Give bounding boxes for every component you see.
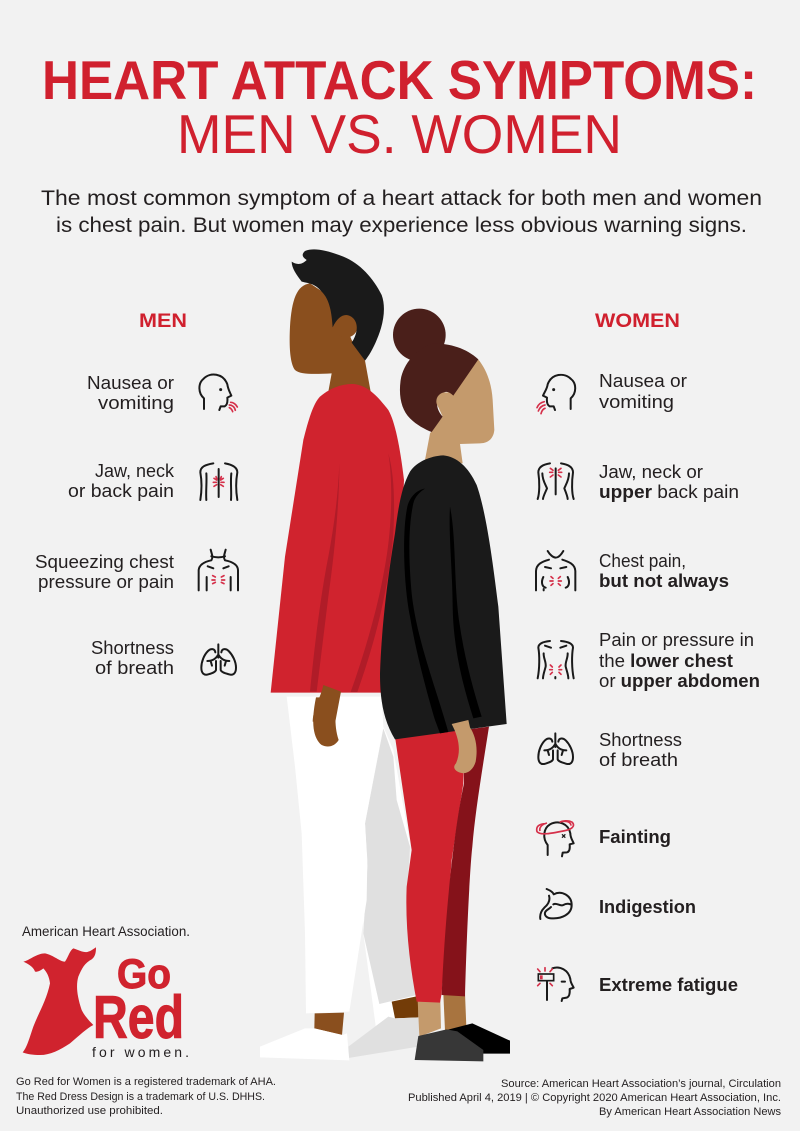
footer: trademark notice: Unauthorized use prohibited.: [16, 1105, 163, 1117]
women symptom: lower chest or upper abdomen: [599, 629, 760, 691]
men symptom: shortness of breath: Shortness: [91, 637, 174, 658]
women symptom: chest pain, but not always: [599, 550, 729, 591]
icon: chest pressure: [199, 550, 238, 590]
footer: source and copyright: [408, 1078, 781, 1118]
footer: source and copyright: Source: American Heart Association’s journal, Circulation: [501, 1078, 781, 1090]
women symptom: shortness of breath: of breath: [599, 749, 678, 770]
women symptom: nausea: Nausea or: [599, 370, 687, 391]
title: HEART ATTACK SYMPTOMS:: [42, 49, 757, 111]
heading: men: MEN: [139, 310, 187, 332]
man's hair: [292, 249, 384, 361]
women symptom: nausea: [599, 370, 687, 412]
icon: head vomiting: [199, 375, 237, 412]
woman's black cardigan: [380, 455, 507, 739]
man's red sweater: [271, 384, 404, 722]
women symptom: extreme fatigue: Extreme fatigue: [599, 974, 738, 995]
icon: lungs: [538, 733, 573, 764]
icon: lungs: [201, 644, 236, 675]
icon: lower chest pain: [538, 641, 574, 678]
logo text: for women: for women.: [92, 1044, 189, 1060]
icons: women column: [536, 375, 575, 1001]
men symptom: nausea: Nausea or: [87, 372, 174, 393]
women symptom: chest pain, but not always: Chest pain,: [599, 550, 686, 571]
logo text: Go: Go: [117, 950, 171, 997]
men symptom: chest pressure: [35, 551, 174, 592]
women symptom: lower chest or upper abdomen: or upper abdomen: [599, 670, 760, 691]
woman's shoes: [447, 1023, 510, 1054]
icon: extreme fatigue head: [538, 968, 574, 1001]
women symptom: nausea: vomiting: [599, 391, 674, 412]
heading: women: WOMEN: [595, 310, 680, 332]
women symptom: chest pain, but not always: but not always: [599, 570, 729, 591]
men symptom: shortness of breath: of breath: [95, 657, 174, 678]
women symptom: shortness of breath: Shortness: [599, 729, 682, 750]
icon: head vomiting: [537, 375, 575, 414]
footer: trademark notice: [16, 1076, 276, 1117]
icon: fainting head: [537, 821, 574, 856]
women symptom: jaw, neck or upper back pain: [599, 461, 739, 502]
men symptom: chest pressure: pressure or pain: [38, 571, 174, 592]
men symptom: jaw, neck or back pain: Jaw, neck: [95, 460, 175, 481]
intro text: is chest pain. But women may experience less obvious warning signs.: [56, 213, 747, 237]
icon: back pain: [200, 463, 237, 500]
women symptom: jaw, neck or upper back pain: Jaw, neck or: [599, 461, 703, 482]
footer: trademark notice: The Red Dress Design is a trademark of U.S. DHHS.: [16, 1091, 265, 1103]
illustration: man and woman standing back to back: [260, 249, 510, 1061]
footer: trademark notice: Go Red for Women is a registered trademark of AHA.: [16, 1076, 276, 1088]
men symptom: jaw, neck or back pain: [68, 460, 175, 501]
title: [42, 49, 757, 165]
logo: American Heart Association, Go Red for Women: [22, 924, 190, 1060]
man's legs and shoes: [260, 697, 420, 1060]
footer: source and copyright: Published April 4, 2019 | © Copyright 2020 American Heart Association, Inc.: [408, 1092, 781, 1104]
men symptom: nausea: vomiting: [98, 392, 174, 413]
woman's ear: [436, 392, 454, 410]
intro text: [41, 186, 762, 237]
men symptom: chest pressure: Squeezing chest: [35, 551, 174, 572]
logo text: American Heart Association: American Heart Association.: [22, 924, 190, 939]
women symptom: shortness of breath: [599, 729, 682, 770]
women symptom: jaw, neck or upper back pain: upper back pain: [599, 481, 739, 502]
icons: men column: [199, 375, 238, 675]
logo text: Red: Red: [93, 984, 184, 1051]
women symptom: indigestion: Indigestion: [599, 896, 696, 917]
footer: source and copyright: By American Heart Association News: [599, 1106, 781, 1118]
women symptom: lower chest or upper abdomen: the lower chest: [599, 650, 733, 671]
men symptom: nausea: [87, 372, 174, 413]
intro text: The most common symptom of a heart attack for both men and women: [41, 186, 762, 210]
man's hand (upper): [313, 685, 341, 722]
man's hand: [313, 697, 339, 747]
men symptom: shortness of breath: [91, 637, 174, 678]
title: MEN VS. WOMEN: [177, 103, 622, 165]
logo: red dress: [23, 947, 96, 1055]
woman's legs: [395, 727, 510, 1061]
men symptom: jaw, neck or back pain: or back pain: [68, 480, 174, 501]
icon: stomach: [540, 889, 572, 919]
icon: upper back pain: [538, 463, 574, 499]
woman's head: [380, 309, 507, 739]
icon: chest pain: [536, 551, 575, 590]
women symptom: lower chest or upper abdomen: Pain or pressure in: [599, 629, 754, 650]
man's head and neck: [290, 249, 384, 392]
women symptom: fainting: Fainting: [599, 826, 671, 847]
woman's hand: [452, 720, 477, 773]
